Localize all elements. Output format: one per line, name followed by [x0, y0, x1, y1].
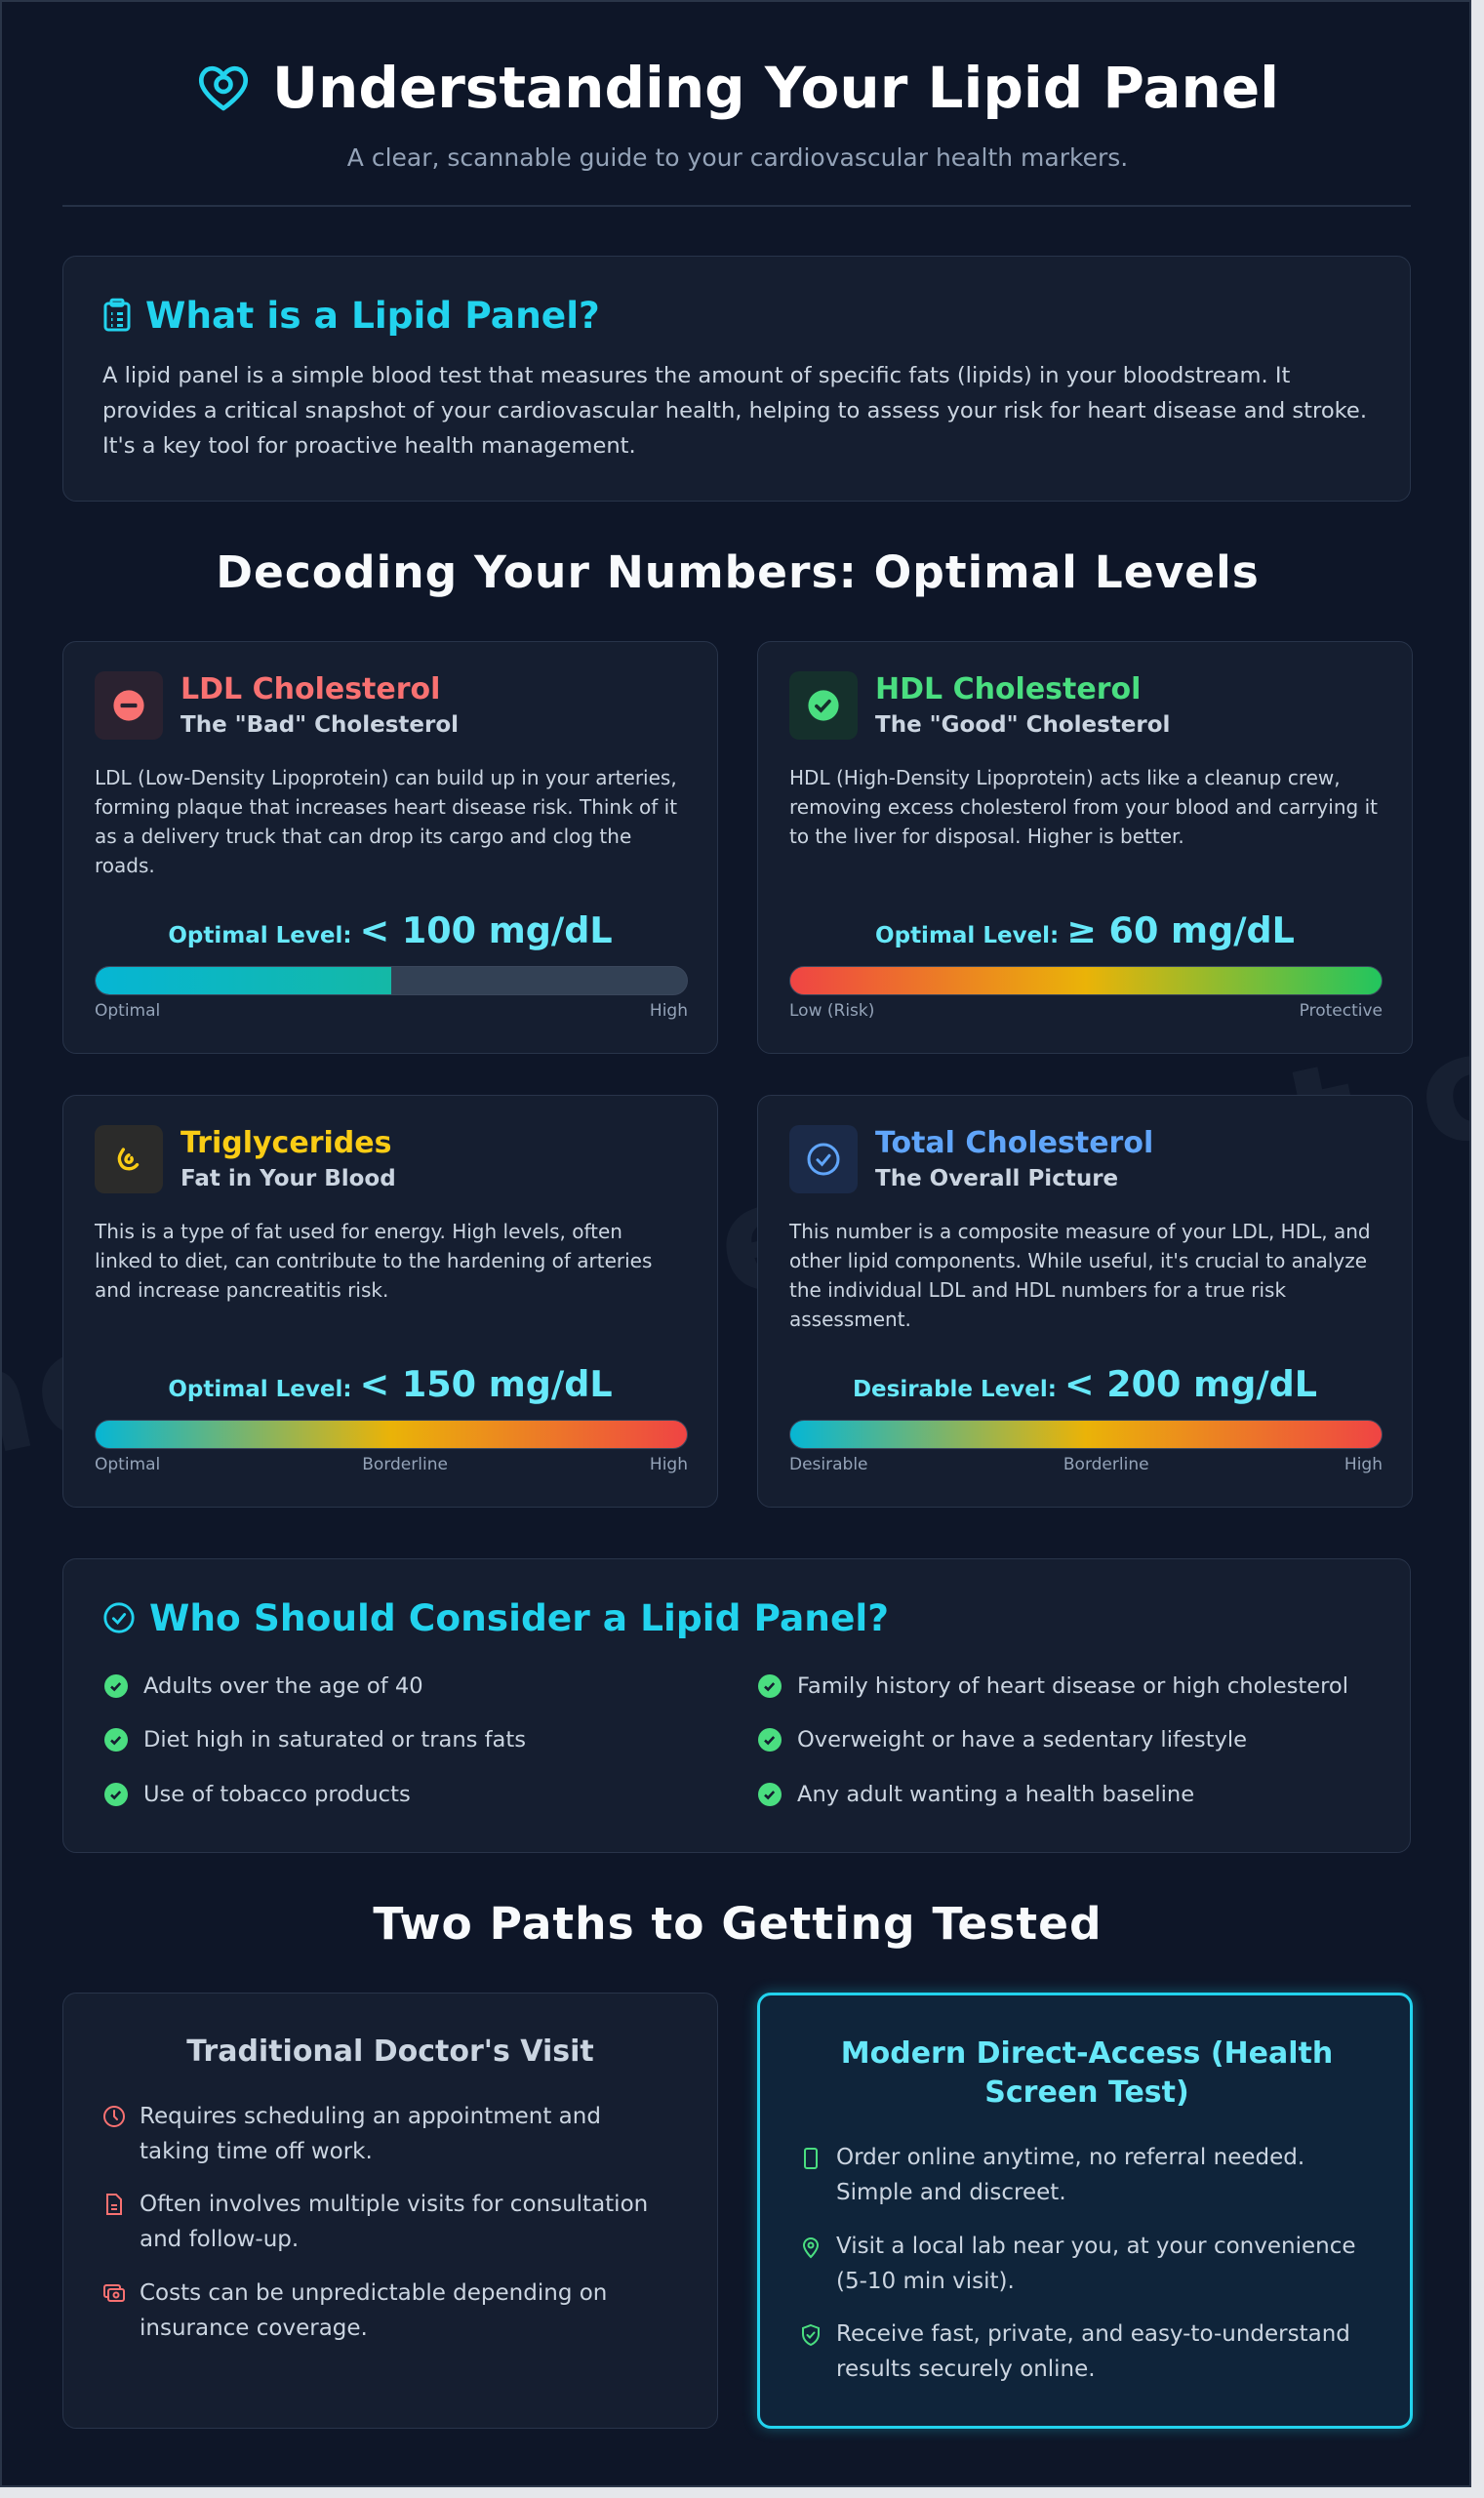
panel: triglycerides: linked to diet, can contribute to the hardening of arteries and increase pancreatitis risk.	[95, 1249, 652, 1302]
panel: total cholesterol	[757, 1095, 1413, 1508]
panel: LDL: LDL (Low-Density Lipoprotein) can build up in your arteries, forming plaque that increases heart disease risk. Think of it as a delivery truck that can drop its cargo and clog the roads.	[95, 766, 677, 877]
panel: traditional: Requires scheduling an appointment and taking time off work.	[140, 2104, 601, 2164]
heading: decoding: Decoding Your Numbers: Optimal Levels	[216, 546, 1260, 598]
panel: LDL: LDL Cholesterol	[180, 672, 440, 706]
icon: minus	[95, 671, 163, 740]
panel: total cholesterol: Desirable	[789, 1455, 868, 1474]
panel: who should consider: Any adult wanting a health baseline	[797, 1782, 1194, 1807]
title: Understanding Your Lipid Panel	[272, 55, 1279, 121]
panel: total cholesterol: This number is a composite measure of your LDL, HDL, and other lipid components. While useful, it's crucial to analyze the individual LDL and HDL numbers for a true risk assessment.	[789, 1220, 1371, 1331]
panel: triglycerides: High	[650, 1455, 688, 1474]
panel: HDL: The "Good" Cholesterol	[875, 712, 1170, 738]
panel: total cholesterol: Total Cholesterol	[875, 1126, 1153, 1160]
subtitle: A clear, scannable guide to your cardiovascular health markers.	[347, 143, 1128, 172]
heading: two paths: Two Paths to Getting Tested	[373, 1898, 1103, 1950]
panel: triglycerides: This is a type of fat used for energy. High levels, often	[95, 1220, 622, 1243]
panel: total cholesterol: High	[1344, 1455, 1383, 1474]
panel: HDL	[757, 641, 1413, 1054]
panel: traditional	[62, 1993, 718, 2429]
panel: triglycerides: Triglycerides	[180, 1126, 391, 1160]
panel: who should consider	[62, 1558, 1411, 1853]
panel: LDL: Optimal Level: < 100 mg/dL	[168, 909, 613, 951]
panel: HDL: Low (Risk)	[789, 1001, 874, 1021]
icon: circle check	[789, 1125, 858, 1193]
panel: LDL: Optimal	[95, 1001, 160, 1021]
panel: total cholesterol: Borderline	[1063, 1455, 1149, 1474]
panel: HDL: Optimal Level: ≥ 60 mg/dL	[875, 909, 1295, 951]
icon: check	[789, 671, 858, 740]
panel: triglycerides: Optimal Level: < 150 mg/dL	[168, 1363, 613, 1405]
panel: triglycerides: Fat in Your Blood	[180, 1166, 396, 1191]
text: A lipid panel is a simple blood test that measures the amount of specific fats (lipids) in your bloodstream. It provides a critical snapshot of your cardiovascular health, helping to assess your risk for heart disease and stroke. It's a key tool for proactive health management.	[102, 363, 1367, 459]
bar	[95, 1420, 688, 1449]
panel: traditional: Often involves multiple visits for consultation and follow-up.	[140, 2192, 648, 2252]
panel: who should consider: Use of tobacco products	[143, 1782, 411, 1807]
panel: LDL: The "Bad" Cholesterol	[180, 712, 459, 738]
panel: total cholesterol: Desirable Level: < 200 mg/dL	[853, 1363, 1317, 1405]
icon: drop	[95, 1125, 163, 1193]
panel: LDL: High	[650, 1001, 688, 1021]
panel: modern direct-access: Modern Direct-Access (Health Screen Test)	[841, 2036, 1333, 2110]
panel: modern direct-access: Receive fast, private, and easy-to-understand results securely online.	[836, 2321, 1350, 2382]
panel: triglycerides: Optimal	[95, 1455, 160, 1474]
panel: modern direct-access: Order online anytime, no referral needed. Simple and discreet.	[836, 2145, 1304, 2205]
panel: HDL: Protective	[1300, 1001, 1383, 1021]
panel: LDL	[62, 641, 718, 1054]
panel: HDL: HDL (High-Density Lipoprotein) acts like a cleanup crew, removing excess cholesterol from your blood and carrying it to the liver for disposal. Higher is better.	[789, 766, 1378, 848]
panel: modern direct-access: Visit a local lab near you, at your convenience (5-10 min visit).	[836, 2234, 1356, 2294]
panel: who should consider: Family history of heart disease or high cholesterol	[797, 1673, 1348, 1699]
list: Adults over the age of 40	[143, 1673, 423, 1699]
panel: triglycerides: Borderline	[362, 1455, 448, 1474]
icon: heart	[199, 66, 248, 111]
bar	[95, 966, 688, 995]
panel: who should consider: Overweight or have a sedentary lifestyle	[797, 1727, 1247, 1753]
heading: Who Should Consider a Lipid Panel?	[149, 1596, 889, 1639]
panel: triglycerides	[62, 1095, 718, 1508]
panel: who should consider: Diet high in saturated or trans fats	[143, 1727, 526, 1753]
panel: modern direct-access	[757, 1993, 1413, 2429]
panel: total cholesterol: The Overall Picture	[875, 1166, 1118, 1191]
panel: HDL: HDL Cholesterol	[875, 672, 1141, 706]
panel: what is a lipid panel	[62, 256, 1411, 502]
bar	[789, 966, 1383, 995]
bar	[789, 1420, 1383, 1449]
panel: traditional: Traditional Doctor's Visit	[186, 2035, 594, 2069]
panel: traditional: Costs can be unpredictable depending on insurance coverage.	[140, 2280, 607, 2341]
heading: What is a Lipid Panel?	[145, 294, 600, 337]
